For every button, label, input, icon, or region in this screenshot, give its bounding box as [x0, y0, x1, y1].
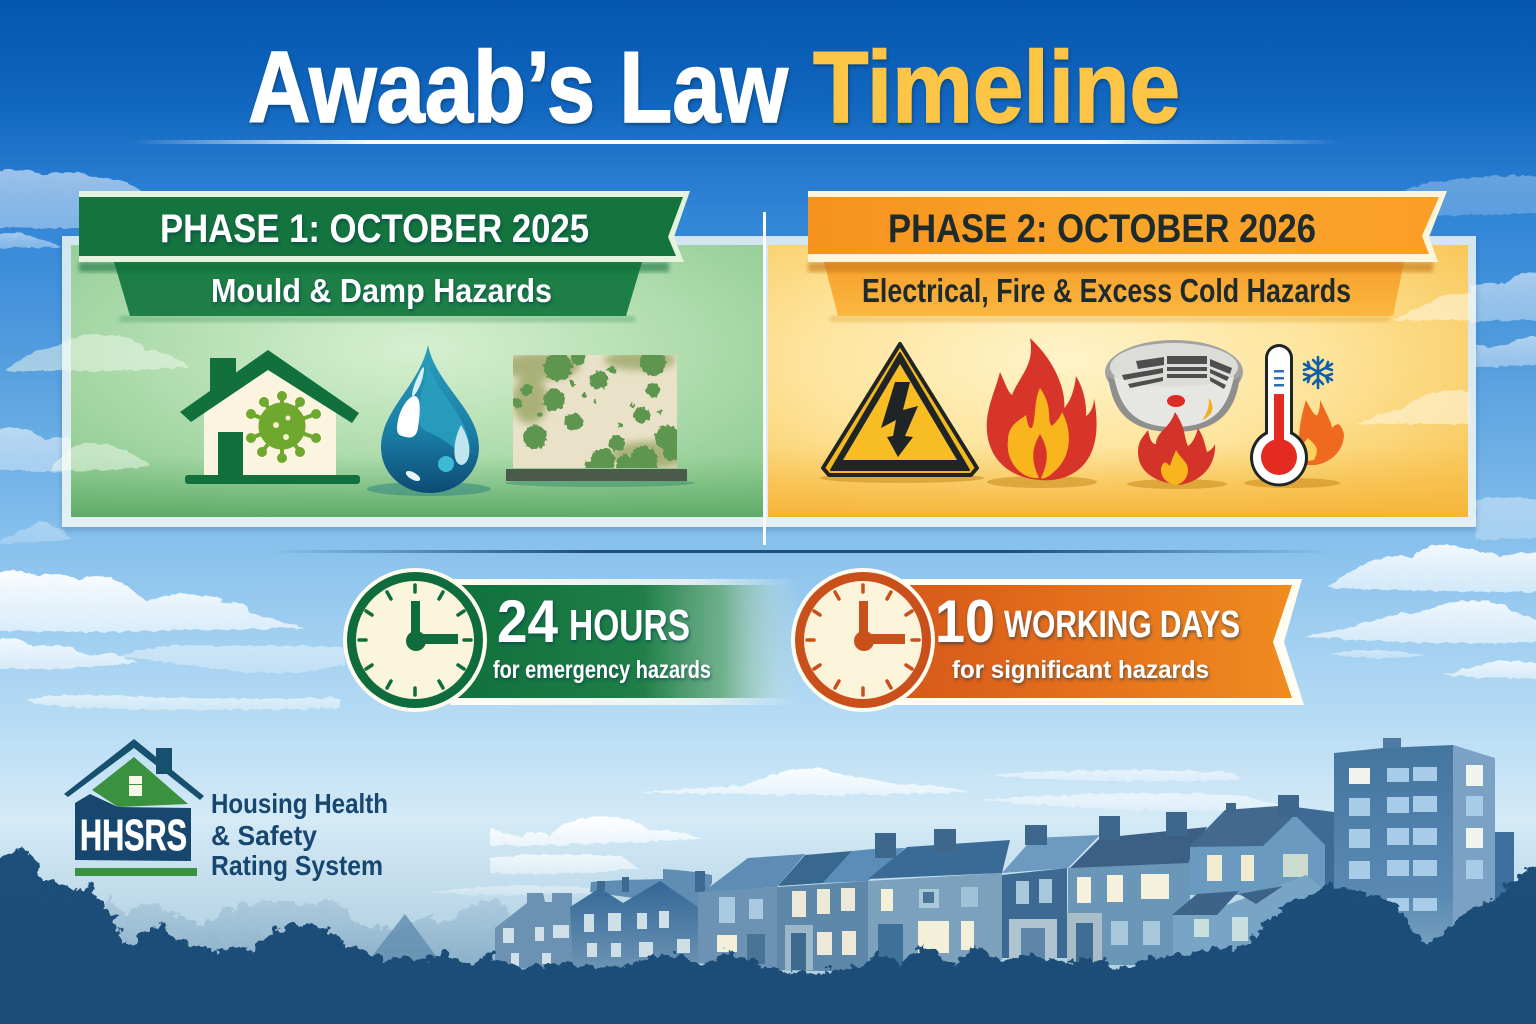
banner: phase 1: [79, 191, 690, 322]
logo text: Housing Health: [211, 788, 388, 819]
panel: phase 2 electrical fire cold: [768, 245, 1470, 517]
distant trees and haze: [100, 895, 530, 990]
logo text: [211, 788, 388, 881]
logo house: [64, 739, 204, 861]
24 hours text: 24: [497, 588, 559, 655]
panels white frame: [62, 236, 1476, 527]
icon: electrical warning triangle: [820, 344, 984, 483]
title: [248, 32, 1180, 144]
10 working days text: for significant hazards: [952, 656, 1209, 684]
phase 2 heading: PHASE 2: OCTOBER 2026: [888, 207, 1316, 251]
phase 1 subheading: Mould & Damp Hazards: [211, 272, 552, 309]
HHSRS logo: [64, 739, 388, 881]
foreground trees silhouette: [0, 847, 1536, 1024]
housing terrace skyline: [365, 738, 1514, 975]
icon: thermometer with snowflake and flame: [1244, 344, 1344, 488]
logo text: Rating System: [211, 850, 383, 881]
terrace house F: [1002, 825, 1100, 961]
clouds: [0, 170, 1536, 896]
10 working days text: WORKING DAYS: [1004, 604, 1240, 646]
logo HHSRS wordmark: HHSRS: [80, 811, 187, 860]
24 hours text: [493, 588, 711, 684]
deadline: 24 hours: [343, 568, 800, 712]
icon: mouldy wall: [500, 350, 695, 487]
panel clouds: [5, 335, 190, 470]
clock: green: [343, 568, 487, 712]
icon: house with virus: [180, 350, 360, 484]
title underline: [130, 140, 1340, 144]
icon: water drop: [367, 345, 491, 496]
logo green bar: [75, 868, 197, 876]
panel clouds: [1355, 293, 1470, 424]
24 hours text: HOURS: [569, 601, 690, 650]
tower block: [1334, 738, 1514, 962]
phase 2 subheading: Electrical, Fire & Excess Cold Hazards: [862, 272, 1351, 309]
10 working days text: [935, 588, 1240, 684]
far house: [365, 914, 450, 975]
terrace house B: [570, 869, 712, 970]
phase divider line: [763, 212, 766, 545]
deadline: 10 working days: [791, 568, 1304, 712]
terrace house H: [1172, 795, 1335, 965]
panel: phase 1 mould and damp: [5, 245, 763, 517]
icon: smoke detector with flame: [1105, 340, 1243, 489]
24 hours text: for emergency hazards: [493, 656, 711, 684]
divider line between panels and deadlines: [270, 550, 1330, 553]
virus: [246, 391, 321, 463]
clock: orange: [791, 568, 935, 712]
icon: flame: [987, 338, 1097, 488]
terrace house D: [777, 848, 905, 972]
terrace house C: [698, 854, 805, 975]
phase 1 heading: PHASE 1: OCTOBER 2025: [160, 207, 589, 251]
terrace house A: [495, 893, 573, 970]
terrace house G: [1067, 812, 1207, 965]
title: Awaab’s Law: [248, 32, 788, 144]
10 working days text: 10: [935, 588, 995, 655]
logo text: & Safety: [211, 820, 317, 851]
title: Timeline: [813, 32, 1180, 144]
banner: phase 2: [808, 191, 1447, 322]
terrace house E: [868, 829, 1010, 970]
